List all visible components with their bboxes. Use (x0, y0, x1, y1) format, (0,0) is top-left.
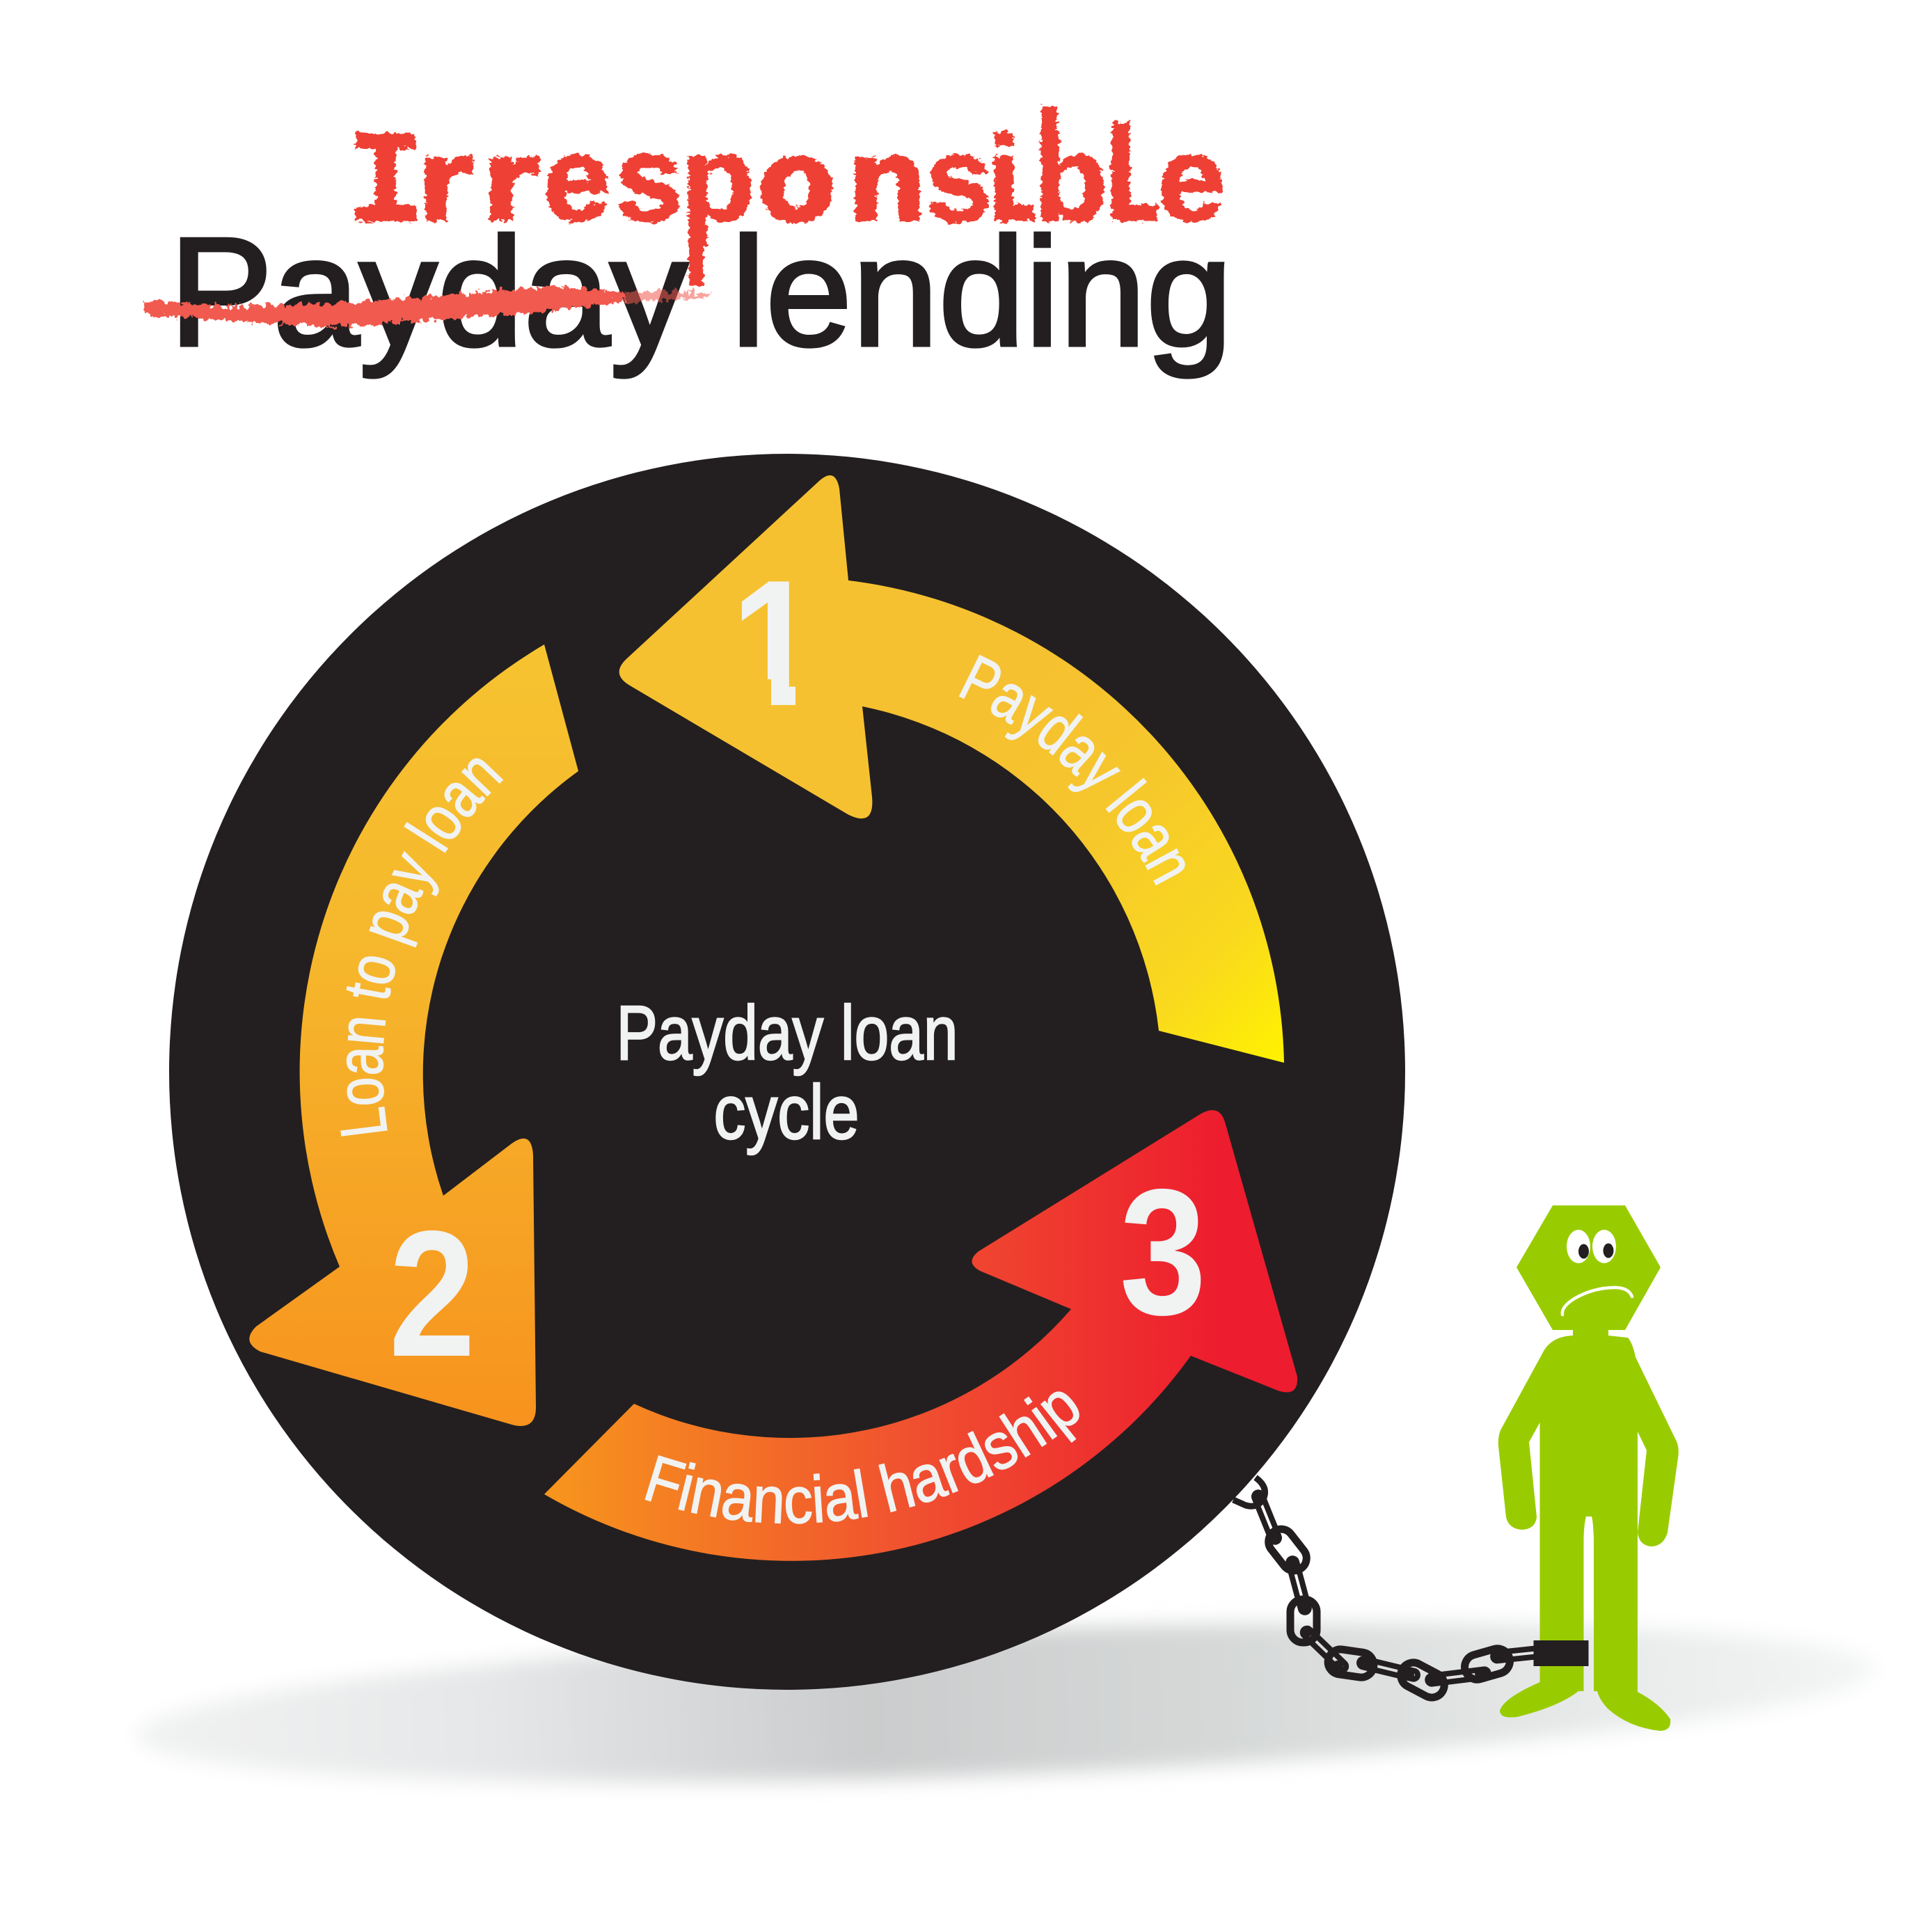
title: Irresponsible handwritten word: I (346, 111, 425, 261)
centre label: Payday loan cycle: Payday loan (617, 990, 958, 1076)
title: Irresponsible handwritten word: esp (543, 111, 755, 247)
number 3: 3 (1120, 1152, 1206, 1352)
title: Irresponsible handwritten word (346, 106, 1225, 285)
number 1: 1 (731, 543, 818, 743)
strike-through scribble over Payday (142, 287, 710, 327)
number 2: 2 (389, 1194, 475, 1394)
title: Irresponsible handwritten word: sible (925, 111, 1225, 247)
title: Irresponsible handwritten word: rr (416, 114, 538, 248)
ankle shackle (1534, 1640, 1588, 1666)
chain (1233, 1478, 1539, 1702)
label: Financial hardship: Financial hardship (644, 1391, 1079, 1524)
green sad person (1498, 1205, 1679, 1731)
label: Loan to pay loan: Loan to pay loan (340, 759, 504, 1137)
centre label: Payday loan cycle: cycle (714, 1070, 859, 1155)
body (1498, 1329, 1679, 1731)
title: Payday lending: Payday lending (169, 206, 1233, 379)
title: Irresponsible handwritten word: on (757, 114, 928, 248)
label: Payday loan: Payday loan (959, 654, 1185, 885)
arrow 1: Payday loan (619, 475, 1284, 1063)
centre label: Payday loan cycle (617, 990, 958, 1155)
sad mouth (1562, 1288, 1632, 1315)
head hexagon (1517, 1205, 1661, 1330)
wrecking ball circle (169, 454, 1405, 1690)
eyes (1567, 1230, 1616, 1263)
arrow 3: Financial hardship (544, 1110, 1297, 1561)
ground shadow (134, 1597, 1878, 1808)
arrow 2: Loan to pay loan (249, 644, 578, 1426)
